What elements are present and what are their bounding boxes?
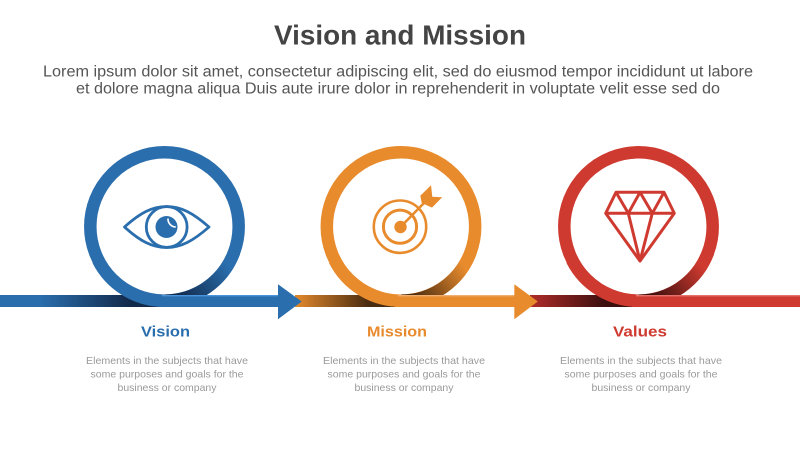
heading: mission: Mission [367, 324, 427, 340]
text block: values: Elements in the subjects that have [560, 355, 722, 367]
arrow: vision to mission [278, 284, 302, 319]
icon: diamond [606, 192, 674, 261]
icon: eye [124, 206, 209, 248]
text block: mission: business or company [354, 382, 454, 394]
text block: mission: Elements in the subjects that have [323, 355, 485, 367]
text block: vision: some purposes and goals for the [90, 368, 244, 380]
text block: vision: Elements in the subjects that have [86, 355, 248, 367]
panel: values loop [530, 152, 800, 307]
subtitle text: Lorem ipsum dolor sit amet, consectetur adipiscing elit, sed do eiusmod tempor incididunt ut labore [43, 64, 753, 80]
text block: mission: some purposes and goals for the [328, 368, 481, 380]
subtitle text: et dolore magna aliqua Duis aute irure dolor in reprehenderit in voluptate velit esse sed do [76, 80, 720, 98]
text block: vision: business or company [118, 382, 217, 394]
panel: mission loop [295, 152, 538, 319]
title: Vision and Mission [274, 20, 526, 50]
arrow: mission to values [514, 284, 538, 319]
subtitle text [43, 64, 753, 98]
text block: vision [86, 355, 248, 394]
heading: values: Values [613, 324, 667, 340]
panel: vision loop [0, 152, 302, 319]
text block: mission [323, 355, 485, 394]
icon: target [374, 185, 442, 253]
text block: values [560, 355, 722, 394]
heading: vision: Vision [141, 324, 190, 340]
text block: values: some purposes and goals for the [564, 368, 718, 380]
text block: values: business or company [592, 382, 691, 394]
